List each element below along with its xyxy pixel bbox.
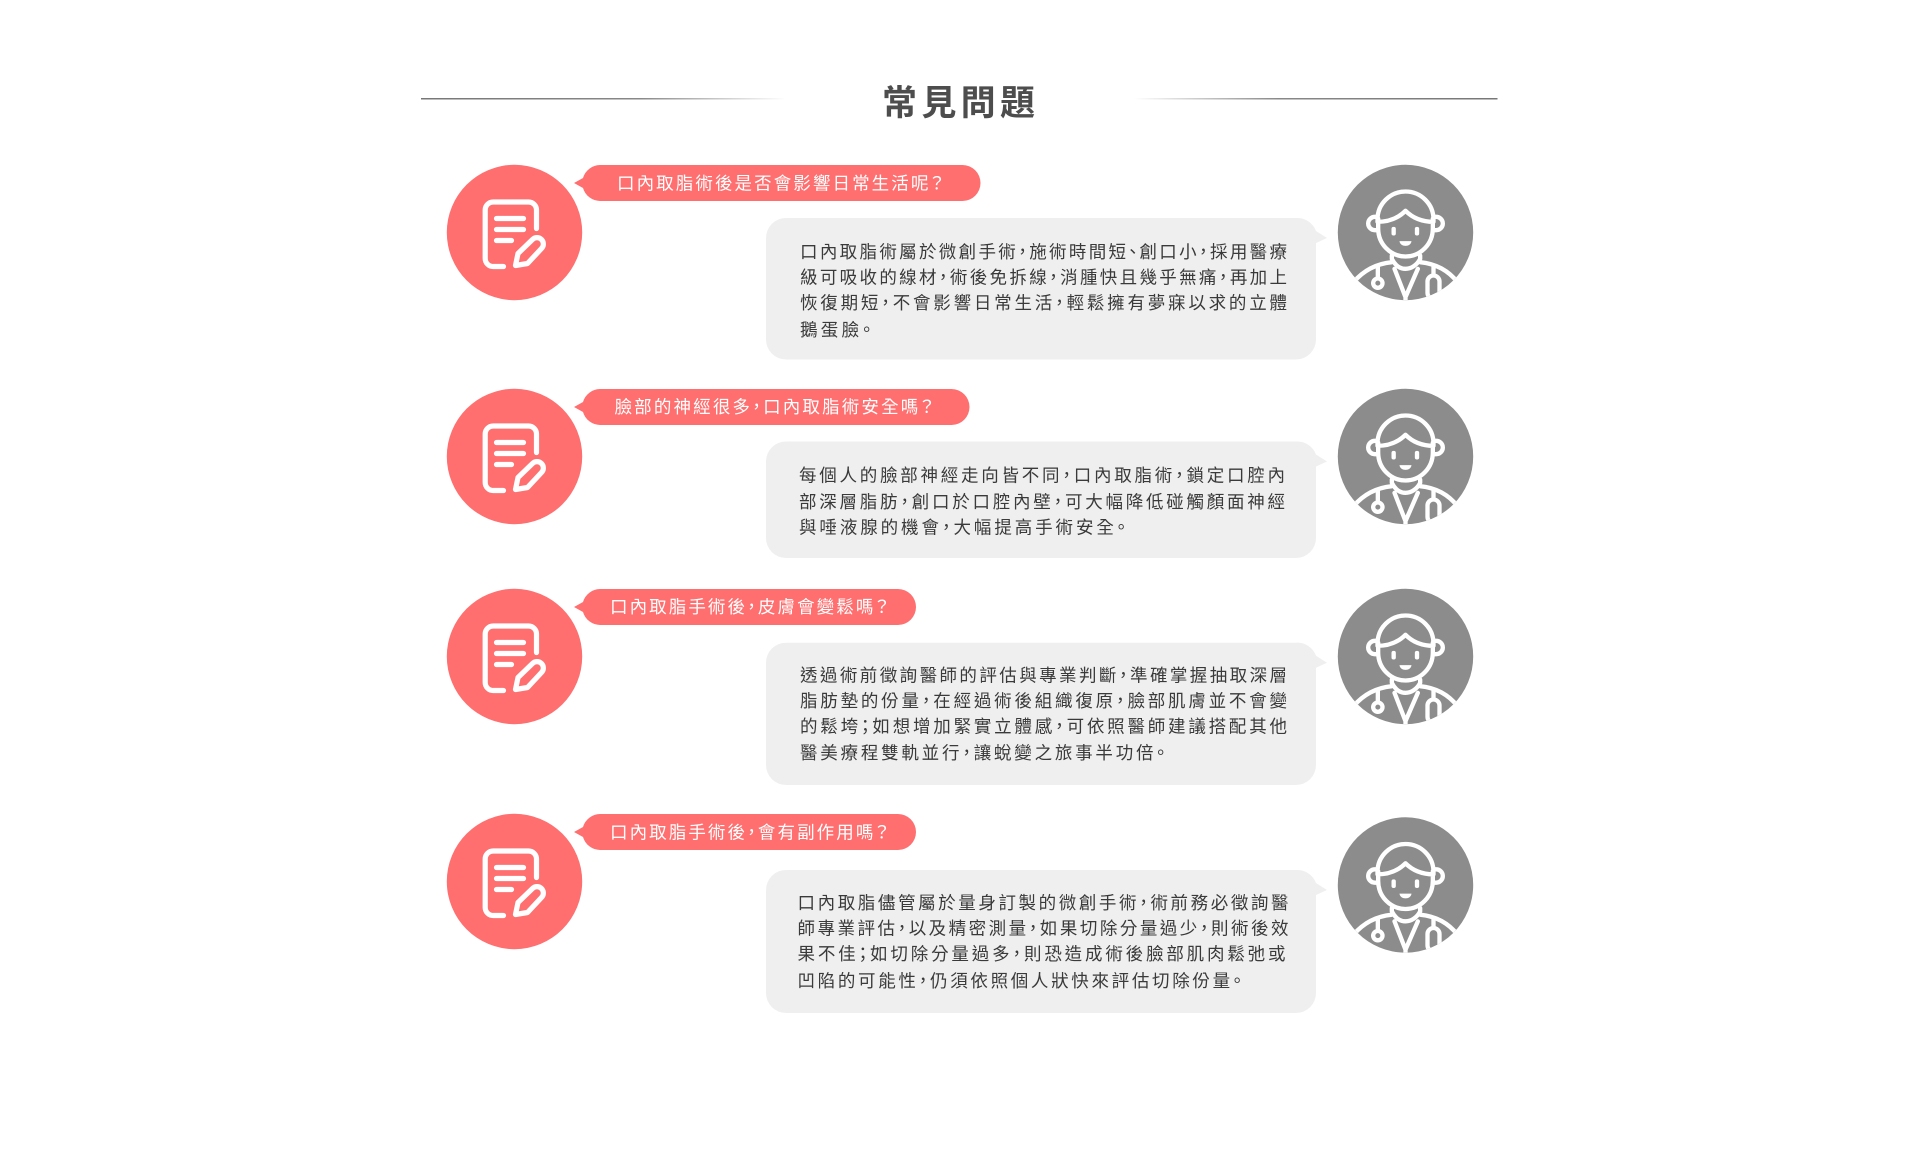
- question bubble: [574, 389, 970, 425]
- question bubble: 口內取脂術後是否會影響日常生活呢？: [617, 174, 943, 194]
- answer bubble: [766, 643, 1327, 785]
- icon: document and pencil: [447, 814, 582, 949]
- question bubble: [574, 814, 916, 850]
- answer bubble: 透過術前徵詢醫師的評估與專業判斷，準確掌握抽取深層: [800, 665, 1287, 685]
- question bubble: [574, 165, 980, 201]
- question bubble: 臉部的神經很多，口內取脂術安全嗎？: [614, 397, 933, 417]
- question bubble: 口內取脂手術後，皮膚會變鬆嗎？: [610, 597, 888, 617]
- panel: question 1: [447, 165, 1473, 360]
- answer bubble: 與唾液腺的機會，大幅提高手術安全。: [799, 518, 1126, 538]
- question bubble: [574, 589, 916, 625]
- answer bubble: 師專業評估，以及精密測量，如果切除分量過少，則術後效: [798, 918, 1288, 938]
- panel: question 2: [447, 389, 1473, 558]
- icon: doctor avatar: [1338, 389, 1473, 527]
- heading: 常見問題: [882, 84, 1035, 123]
- answer bubble: 脂肪墊的份量，在經過術後組織復原，臉部肌膚並不會變: [800, 691, 1287, 711]
- answer bubble: 部深層脂肪，創口於口腔內壁，可大幅降低碰觸顏面神經: [799, 492, 1285, 512]
- panel: question 3: [447, 589, 1473, 785]
- icon: doctor avatar: [1338, 589, 1473, 727]
- answer bubble: 鵝蛋臉。: [800, 320, 871, 340]
- answer bubble: 恢復期短，不會影響日常生活，輕鬆擁有夢寐以求的立體: [800, 293, 1287, 313]
- answer bubble: [766, 218, 1327, 360]
- icon: document and pencil: [447, 165, 582, 300]
- question bubble: 口內取脂手術後，會有副作用嗎？: [610, 822, 888, 842]
- answer bubble: 級可吸收的線材，術後免拆線，消腫快且幾乎無痛，再加上: [800, 268, 1287, 288]
- answer bubble: [766, 441, 1327, 558]
- icon: doctor avatar: [1338, 817, 1473, 956]
- panel: question 4: [447, 814, 1473, 1013]
- answer bubble: 口內取脂儘管屬於量身訂製的微創手術，術前務必徵詢醫: [798, 893, 1288, 913]
- answer bubble: 的鬆垮；如想增加緊實立體感，可依照醫師建議搭配其他: [800, 716, 1287, 736]
- answer bubble: 果不佳；如切除分量過多，則恐造成術後臉部肌肉鬆弛或: [798, 944, 1286, 964]
- answer bubble: [766, 870, 1327, 1013]
- icon: document and pencil: [447, 589, 582, 724]
- answer bubble: 凹陷的可能性，仍須依照個人狀快來評估切除份量。: [798, 971, 1242, 991]
- icon: document and pencil: [447, 389, 582, 524]
- icon: doctor avatar: [1338, 165, 1473, 303]
- answer bubble: 口內取脂術屬於微創手術，施術時間短、創口小，採用醫療: [800, 242, 1287, 262]
- answer bubble: 醫美療程雙軌並行，讓蛻變之旅事半功倍。: [800, 743, 1165, 763]
- answer bubble: 每個人的臉部神經走向皆不同，口內取脂術，鎖定口腔內: [799, 465, 1285, 485]
